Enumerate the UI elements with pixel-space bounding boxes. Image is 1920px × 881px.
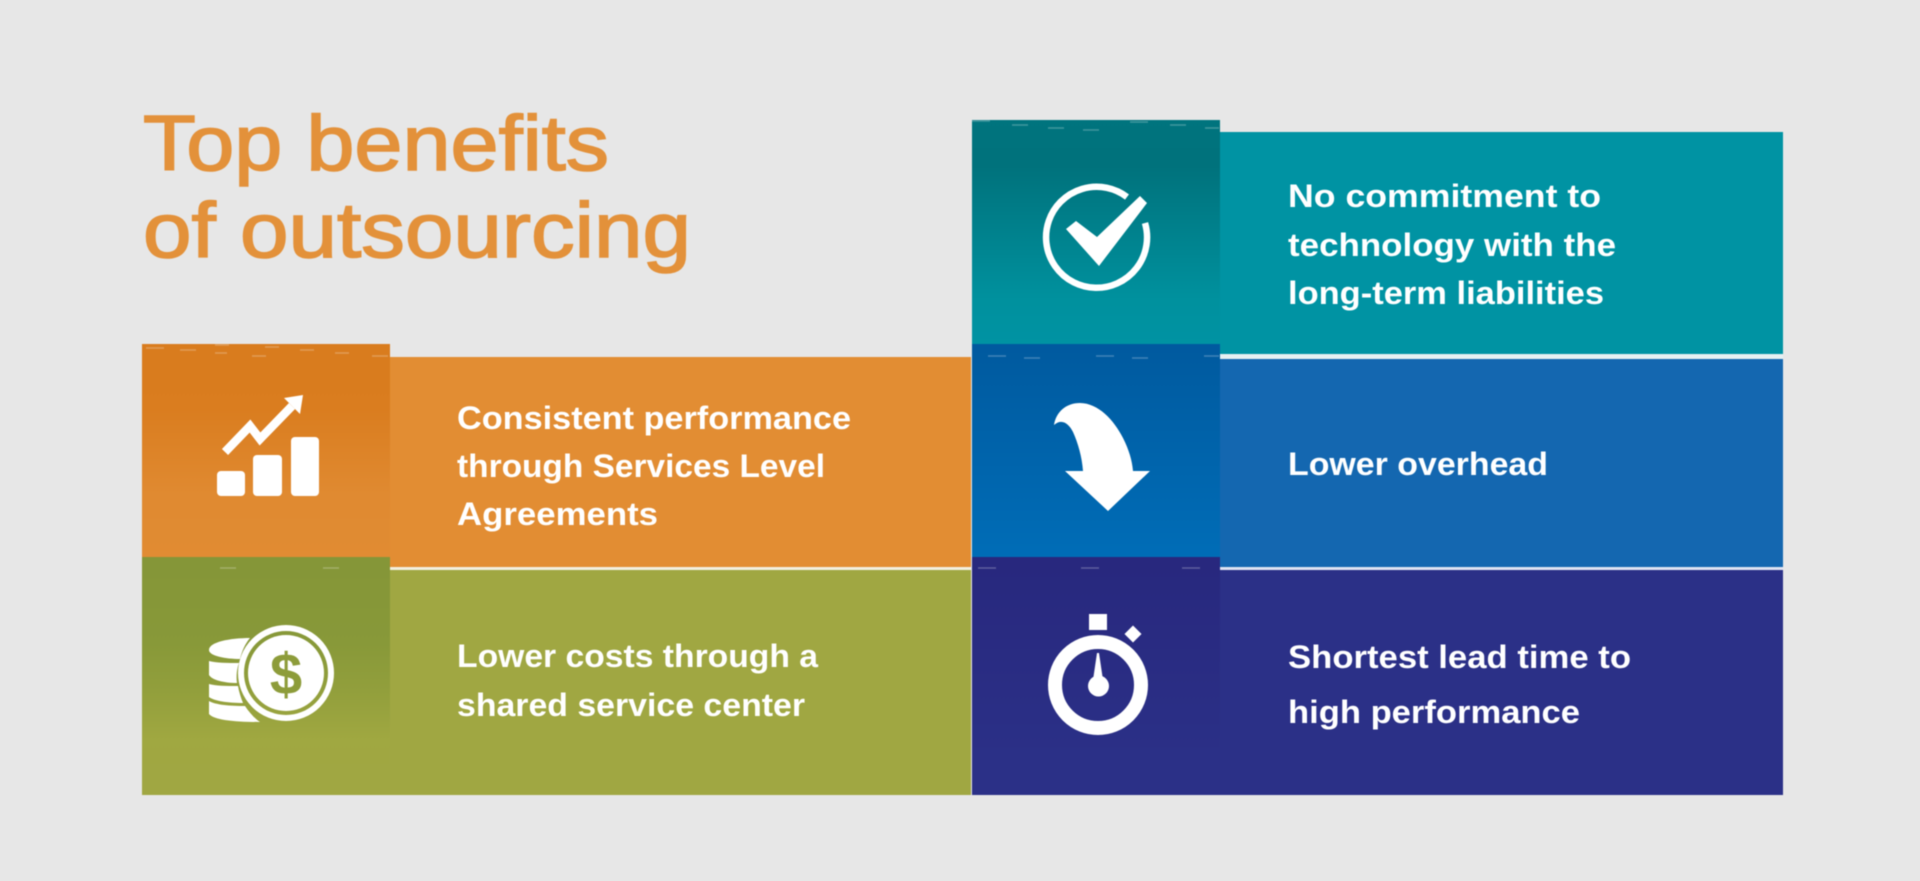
text: lower overhead: Lower overhead [1288,446,1548,482]
divider [1220,567,1783,570]
text: consistent performance [457,400,851,532]
title: Top benefits [143,99,609,187]
panel: consistent performance [142,344,971,568]
title [143,99,691,274]
panel: lower costs [142,557,971,795]
text: lower costs [457,638,818,723]
divider [1220,354,1783,359]
icon: coins: $ [270,642,302,707]
text: shortest lead time: high performance [1288,694,1580,730]
title: of outsourcing [143,186,691,274]
text: shortest lead time [1288,639,1631,730]
icon: check mark [1046,187,1147,288]
text: consistent performance: through Services Level [457,448,825,484]
text: consistent performance: Agreements [457,496,658,532]
text: no commitment: long-term liabilities [1288,275,1604,311]
text: no commitment: technology with the [1288,227,1616,263]
panel: lower overhead [972,344,1783,567]
panel: shortest lead time [972,557,1783,795]
divider [390,567,971,570]
icon: coins [209,628,331,722]
text: consistent performance: Consistent performance [457,400,851,436]
icon: curved down arrow [1054,403,1150,511]
panel: no commitment [972,120,1783,354]
text: lower costs: shared service center [457,687,805,723]
text: no commitment [1288,178,1616,311]
text: no commitment: No commitment to [1288,178,1601,214]
icon: rising bar chart [217,395,319,496]
icon: stopwatch [1055,614,1142,728]
text: shortest lead time: Shortest lead time to [1288,639,1631,675]
text: lower costs: Lower costs through a [457,638,818,674]
